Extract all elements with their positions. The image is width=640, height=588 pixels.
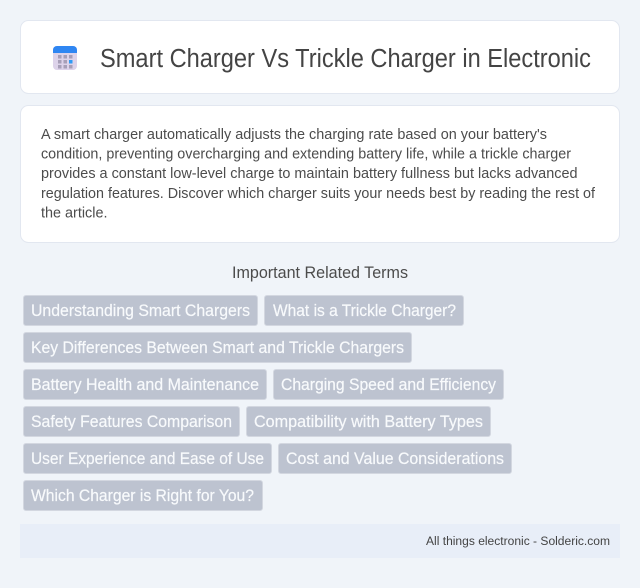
text block: summary: regulation features. Discover which charger suits your needs best by reading the rest of <box>41 186 595 202</box>
tag: charging speed: Charging Speed and Efficiency <box>281 376 497 394</box>
tag list <box>24 296 512 510</box>
title: Smart Charger Vs Trickle Charger in Electronic <box>100 45 591 73</box>
tag: understanding smart chargers: Understanding Smart Chargers <box>31 302 250 320</box>
tag: safety features <box>24 406 240 436</box>
panel: summary paragraph <box>20 106 620 242</box>
icon: calendar <box>53 46 77 70</box>
tag: understanding smart chargers <box>24 296 258 326</box>
tag: which charger: Which Charger is Right for You? <box>31 487 254 505</box>
tag: what is a trickle charger <box>264 296 464 326</box>
tag: what is a trickle charger: What is a Trickle Charger? <box>273 302 456 320</box>
text block: summary <box>41 127 595 221</box>
panel: title header <box>20 20 620 94</box>
tag: compatibility <box>246 406 490 436</box>
footer <box>20 524 620 558</box>
tag: safety features: Safety Features Comparison <box>31 413 232 431</box>
text block: summary: the article. <box>41 205 108 221</box>
text block: summary: provides a constant low-level charge to maintain battery fullness but lacks advanced <box>41 166 578 182</box>
tag: key differences: Key Differences Between Smart and Trickle Chargers <box>31 339 404 357</box>
tag: charging speed <box>274 370 504 400</box>
tag: which charger <box>24 480 262 510</box>
tag: battery health <box>24 370 266 400</box>
text block: summary: condition, preventing overcharging and extending battery life, while a trickle charger <box>41 147 571 163</box>
tag: key differences <box>24 332 412 362</box>
tag: user experience <box>24 444 272 474</box>
tag: compatibility: Compatibility with Battery Types <box>254 413 483 431</box>
footer: All things electronic - Solderic.com <box>426 534 610 548</box>
text block: summary: A smart charger automatically adjusts the charging rate based on your battery's <box>41 127 547 143</box>
tag: battery health: Battery Health and Maintenance <box>31 376 259 394</box>
heading: important related terms: Important Related Terms <box>232 264 408 282</box>
tag: cost and value <box>278 444 512 474</box>
tag: user experience: User Experience and Ease of Use <box>31 450 264 468</box>
tag: cost and value: Cost and Value Considerations <box>286 450 504 468</box>
